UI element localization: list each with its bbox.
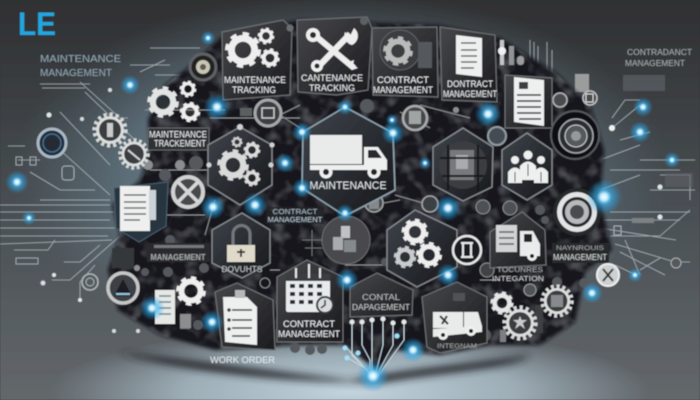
panel: dontract management: DONTRACT bbox=[447, 79, 493, 89]
panel: contract management bbox=[372, 27, 438, 97]
panel: cantenance tracking bbox=[297, 17, 372, 95]
hex: dark machine bbox=[433, 128, 493, 201]
heading: maintenance management: MAINTENANCE bbox=[40, 53, 121, 65]
circuit traces bottom bbox=[342, 316, 406, 376]
panel: contal dapagement: DAPAGEMENT bbox=[352, 303, 410, 312]
icon: wrench circle right bbox=[597, 264, 619, 286]
central dark cluster bbox=[108, 20, 612, 372]
right circuit traces bbox=[530, 40, 695, 275]
label: management right: NAYNROUIS bbox=[556, 245, 605, 252]
panel: documents integration truck bbox=[490, 212, 546, 283]
icon: wrench circle bbox=[173, 177, 203, 207]
antenna bars top right bbox=[498, 40, 524, 65]
heading: contract management bbox=[625, 47, 692, 68]
logo: LE: LE bbox=[18, 6, 56, 42]
panel: calendar contract management bbox=[277, 260, 343, 342]
icon: camera dial bbox=[551, 111, 599, 159]
panel: contract management: CONTRACT bbox=[377, 75, 430, 85]
hex: maintenance truck bbox=[302, 107, 395, 216]
heading: contract management: MANAGEMENT bbox=[625, 58, 685, 68]
panel: contal dapagement bbox=[350, 273, 413, 317]
icon: left lower dial bbox=[108, 273, 138, 303]
label: management right bbox=[552, 243, 609, 263]
panel: integnam truck bbox=[422, 282, 487, 353]
panel: maintenance tracking: TRACKING bbox=[232, 85, 276, 95]
hex: center machine bbox=[302, 216, 370, 264]
panel: contract management: MANAGEMENT bbox=[373, 85, 433, 95]
panel: documents integration truck: TOCUNRES bbox=[497, 265, 543, 274]
heading: contract management: CONTRADANCT bbox=[627, 47, 692, 57]
label: management right: MANAGEMENT bbox=[553, 253, 607, 262]
icon: lower right gears bbox=[492, 287, 571, 342]
label: management left: MANAGEMENT bbox=[150, 253, 206, 262]
panel: integnam truck: INTEGNAM bbox=[437, 343, 477, 350]
icon: left gears bbox=[95, 82, 199, 168]
panel: cantenance tracking: CANTENANCE bbox=[301, 73, 363, 83]
gauge dial bbox=[190, 54, 216, 80]
panel: calendar contract management: MANAGEMENT bbox=[278, 329, 340, 339]
panel: document right bbox=[505, 75, 552, 128]
label: contract management center: MANAGEMENT bbox=[268, 217, 323, 224]
label: management left bbox=[147, 243, 210, 262]
label: maintenance trackement: MAINTENANCE bbox=[149, 130, 207, 140]
hex: gears left bbox=[206, 124, 274, 205]
panel: documents integration truck: INTEGATION bbox=[492, 274, 544, 283]
label: maintenance trackement: TRACKEMENT bbox=[154, 138, 206, 148]
hex: gears lower bbox=[387, 210, 457, 287]
icon: target dial bbox=[553, 188, 601, 236]
hex: lock documents bbox=[212, 213, 270, 278]
blue ring dial bbox=[38, 129, 66, 157]
heading: maintenance management: MANAGEMENT bbox=[40, 67, 113, 79]
panel: cantenance tracking: TRACKING bbox=[309, 83, 355, 93]
floor shadow bbox=[118, 352, 530, 382]
label: maintenance trackement bbox=[148, 128, 209, 150]
label: contract management center bbox=[266, 207, 324, 224]
panel: maintenance tracking: MAINTENANCE bbox=[224, 75, 286, 85]
label: work order: WORK ORDER bbox=[210, 355, 275, 366]
heading: maintenance management bbox=[40, 53, 121, 79]
panel: dontract management: MANAGEMENT bbox=[443, 89, 497, 99]
icon: document shield bbox=[114, 182, 168, 242]
panel: contal dapagement: CONTAL bbox=[362, 293, 401, 302]
panel: maintenance tracking bbox=[222, 20, 294, 100]
icon: pillar circle bbox=[453, 236, 481, 264]
cluster machinery noise texture bbox=[105, 18, 615, 374]
left circuit traces bbox=[0, 48, 200, 333]
cluster machinery parts bbox=[112, 91, 597, 355]
hex: people bbox=[502, 133, 552, 200]
panel: calendar contract management: CONTRACT bbox=[283, 319, 336, 329]
label: contract management center: CONTRACT bbox=[272, 209, 318, 216]
icon: left lower gear bbox=[155, 278, 204, 328]
panel: dontract management bbox=[440, 27, 497, 102]
hex: maintenance truck: MAINTENANCE bbox=[310, 180, 386, 192]
hex: lock documents: DOVUHTS bbox=[222, 265, 262, 274]
panel: work order clipboard bbox=[215, 283, 275, 350]
